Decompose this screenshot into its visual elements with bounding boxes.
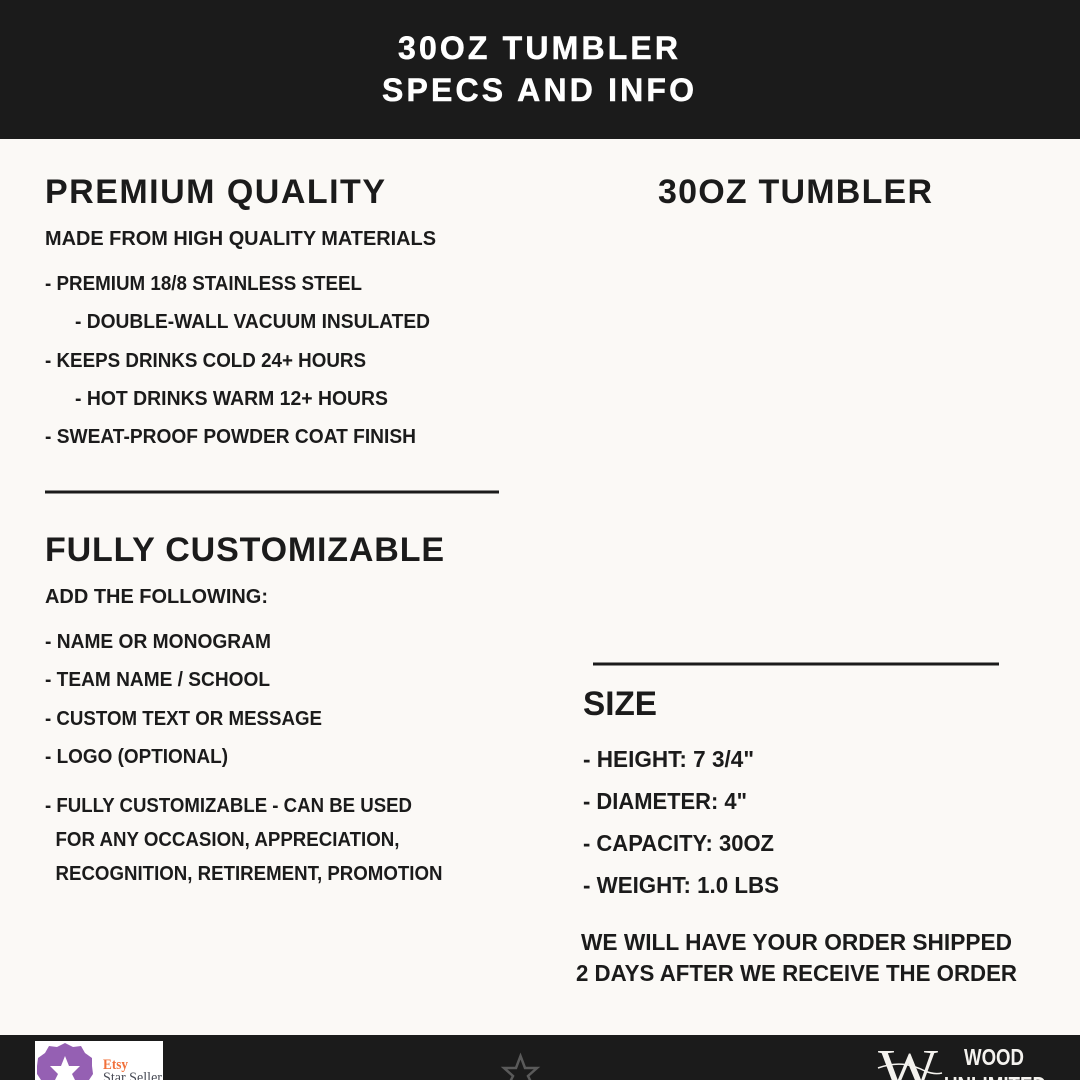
title: SPECS AND INFO — [382, 72, 694, 108]
text block: dimensions: - CAPACITY: 30OZ — [583, 830, 774, 856]
text block: customization options: FOR ANY OCCASION, APPRECIATION, — [56, 829, 400, 851]
panel: size — [576, 685, 1017, 986]
text block: customization options: - TEAM NAME / SCHOOL — [45, 669, 270, 691]
logo: wood unlimited — [878, 1037, 1046, 1080]
heading: fully customizable: FULLY CUSTOMIZABLE — [45, 531, 444, 569]
text block: materials list: - PREMIUM 18/8 STAINLESS STEEL — [45, 273, 362, 295]
title: 30OZ TUMBLER — [398, 30, 678, 66]
text block: materials list — [45, 228, 436, 448]
text block: customization options: - NAME OR MONOGRAM — [45, 631, 271, 653]
text block: materials list: - SWEAT-PROOF POWDER COAT FINISH — [45, 426, 416, 448]
icon: etsy star seller badge — [35, 1041, 163, 1080]
text block: customization options: - FULLY CUSTOMIZABLE - CAN BE USED — [45, 795, 412, 817]
callout: shipping note: 2 DAYS AFTER WE RECEIVE THE ORDER — [576, 960, 1017, 986]
icon: etsy star seller badge: Etsy — [103, 1057, 128, 1073]
logo: wood unlimited: WOOD — [964, 1044, 1024, 1070]
text block: dimensions: - WEIGHT: 1.0 LBS — [583, 872, 779, 898]
callout: shipping note: WE WILL HAVE YOUR ORDER SHIPPED — [581, 929, 1012, 955]
heading: size: SIZE — [583, 685, 657, 723]
text block: customization options: - CUSTOM TEXT OR MESSAGE — [45, 708, 322, 730]
heading: 30oz tumbler: 30OZ TUMBLER — [658, 173, 932, 211]
text block: dimensions — [583, 746, 779, 898]
text block: dimensions: - HEIGHT: 7 3/4" — [583, 746, 754, 772]
text block: materials list: - KEEPS DRINKS COLD 24+ HOURS — [45, 350, 366, 372]
text block: materials list: - DOUBLE-WALL VACUUM INSULATED — [75, 311, 430, 333]
callout: shipping note — [576, 929, 1017, 986]
text block: materials list: - HOT DRINKS WARM 12+ HOURS — [75, 388, 388, 410]
heading: premium quality: PREMIUM QUALITY — [45, 173, 385, 211]
text block: customization options: ADD THE FOLLOWING: — [45, 586, 268, 608]
text block: customization options: - LOGO (OPTIONAL) — [45, 746, 228, 768]
title — [382, 30, 694, 108]
text block: customization options: RECOGNITION, RETIREMENT, PROMOTION — [56, 863, 442, 885]
text block: customization options — [45, 586, 442, 885]
footer band — [0, 1035, 1080, 1080]
icon: outlined star — [504, 1056, 537, 1080]
header band with title — [0, 0, 1080, 139]
panel: fully customizable — [45, 531, 444, 885]
text block: materials list: MADE FROM HIGH QUALITY MATERIALS — [45, 228, 436, 250]
panel: premium quality — [45, 173, 436, 448]
text block: dimensions: - DIAMETER: 4" — [583, 788, 747, 814]
